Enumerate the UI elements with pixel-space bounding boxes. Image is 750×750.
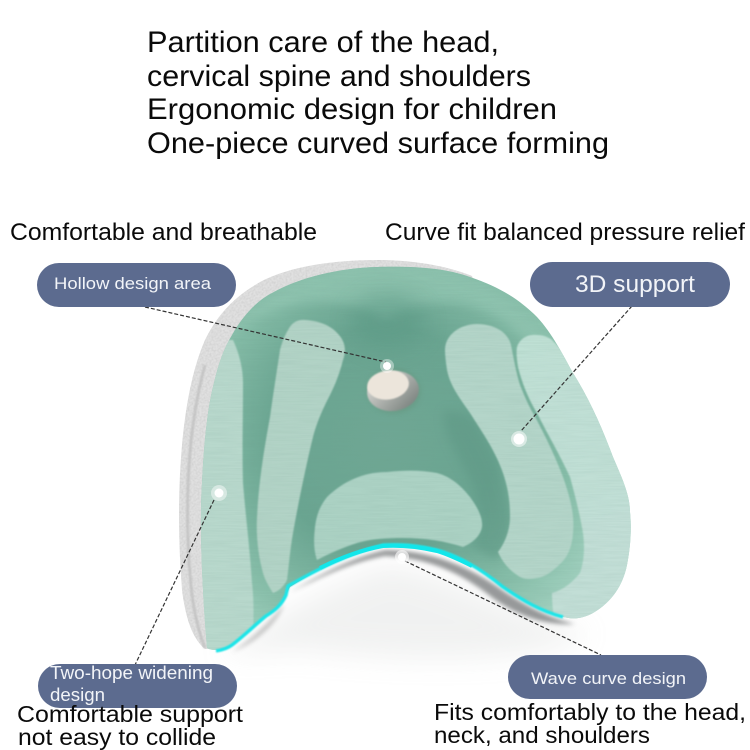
pill: 3D support: 3D support xyxy=(575,271,695,298)
leader line: two-hope widening xyxy=(135,500,214,665)
marker dot: wave curve xyxy=(395,550,409,564)
right inner lobe xyxy=(445,324,573,579)
caption: comfortable support: not easy to collide xyxy=(18,724,216,750)
left outer lobe xyxy=(201,340,254,650)
dark centre shading xyxy=(356,290,420,338)
pill: Hollow design area xyxy=(37,263,236,307)
title xyxy=(147,26,609,160)
caption: fits comfortably: Fits comfortably to the head, xyxy=(434,699,746,725)
leader line: wave curve xyxy=(405,561,601,655)
pill: Two-hope widening design: design xyxy=(50,685,105,705)
leader line: hollow design xyxy=(145,307,386,362)
pillow ground shadow xyxy=(215,550,590,658)
marker dot: 3D support xyxy=(511,431,527,447)
top highlight band xyxy=(260,266,535,336)
marker dot: two-hope widening xyxy=(211,485,227,501)
centre lower lobe xyxy=(314,471,482,560)
right heading: Curve fit balanced pressure relief xyxy=(385,219,745,246)
marker dot: hollow design xyxy=(380,359,394,373)
pillow back seam xyxy=(188,365,205,648)
left heading: Comfortable and breathable xyxy=(10,219,317,246)
title: Ergonomic design for children xyxy=(147,93,557,126)
caption: fits comfortably xyxy=(434,699,746,748)
pillow grey back layer xyxy=(175,255,485,655)
pill: Two-hope widening design: Two-hope widening xyxy=(50,663,213,683)
pill: Two-hope widening design xyxy=(38,663,237,708)
caption: comfortable support: Comfortable support xyxy=(17,701,244,727)
title: cervical spine and shoulders xyxy=(147,60,531,93)
fabric texture xyxy=(190,255,640,655)
caption: comfortable support xyxy=(17,701,244,750)
title: Partition care of the head, xyxy=(147,26,499,59)
pill: Wave curve design: Wave curve design xyxy=(531,669,686,688)
title: One-piece curved surface forming xyxy=(147,127,609,160)
pill: Hollow design area: Hollow design area xyxy=(54,274,212,293)
wave edge highlight xyxy=(216,545,563,651)
pillow illustration xyxy=(175,255,650,660)
caption: fits comfortably: neck, and shoulders xyxy=(434,722,650,748)
pill: 3D support xyxy=(530,262,730,307)
pill: Wave curve design xyxy=(508,655,707,699)
left inner lobe xyxy=(257,320,345,593)
right outer lobe xyxy=(516,334,631,618)
right dark channel xyxy=(452,421,510,558)
pillow green body xyxy=(200,266,631,650)
hollow hole xyxy=(364,368,422,414)
leader line: 3D support xyxy=(521,306,632,431)
